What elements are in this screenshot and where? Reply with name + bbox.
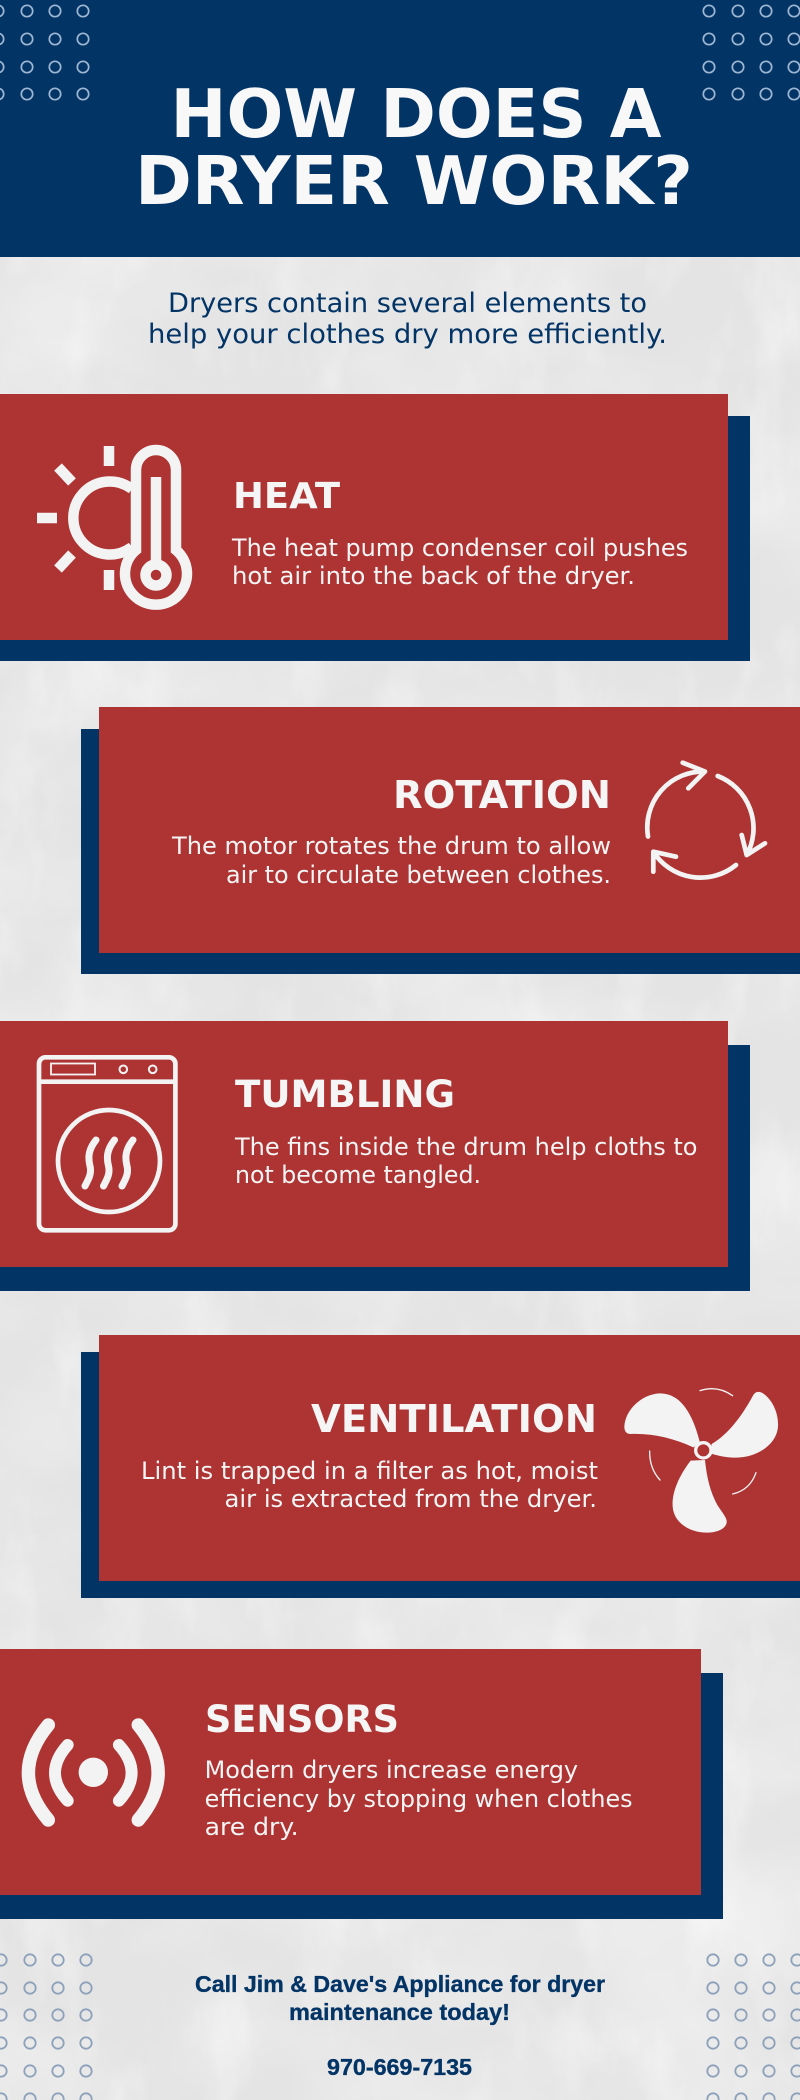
- icon: dryer machine: [39, 1057, 175, 1230]
- text: rotation description: air to circulate between clothes.: [226, 861, 611, 889]
- call to action: maintenance today!: [289, 1999, 510, 2025]
- text: sensors description: are dry.: [205, 1813, 299, 1841]
- subtitle: Dryers contain several elements to: [168, 288, 647, 319]
- text: tumbling description: [234, 1133, 698, 1189]
- call to action: [195, 1971, 605, 2080]
- panel: ventilation: [81, 1335, 800, 1598]
- panel: heat: [0, 394, 750, 661]
- text: sensors description: Modern dryers increase energy: [205, 1756, 578, 1784]
- panel: rotation: [81, 707, 800, 974]
- title: HOW DOES A: [170, 75, 662, 153]
- text: tumbling description: not become tangled.: [235, 1161, 481, 1189]
- heading: rotation: ROTATION: [393, 773, 611, 817]
- heading: sensors: SENSORS: [205, 1698, 399, 1741]
- icon: signal sensor: [28, 1725, 158, 1820]
- icon: sun and thermometer: [37, 446, 187, 605]
- title: [135, 75, 693, 220]
- dot pattern: bottom left: [0, 1954, 92, 2100]
- text: tumbling description: The fins inside the drum help cloths to: [234, 1133, 698, 1161]
- subtitle: [148, 288, 667, 350]
- text: ventilation description: Lint is trapped in a filter as hot, moist: [141, 1457, 598, 1485]
- text: heat description: [231, 534, 688, 590]
- text: sensors description: efficiency by stopping when clothes: [205, 1785, 633, 1813]
- text: sensors description: [205, 1756, 633, 1841]
- call to action: 970-669-7135: [327, 2054, 472, 2080]
- icon: circular arrows: [647, 763, 765, 878]
- text: heat description: hot air into the back of the dryer.: [232, 562, 635, 590]
- dot pattern: bottom right: [707, 1954, 800, 2100]
- dot pattern: top left: [0, 5, 89, 100]
- text: ventilation description: air is extracted from the dryer.: [224, 1485, 597, 1513]
- header band: [0, 0, 800, 257]
- text: heat description: The heat pump condenser coil pushes: [231, 534, 688, 562]
- title: DRYER WORK?: [135, 142, 693, 220]
- heading: ventilation: VENTILATION: [311, 1397, 597, 1441]
- subtitle: help your clothes dry more efficiently.: [148, 319, 667, 350]
- dot pattern: top right: [703, 5, 800, 100]
- panel: sensors: [0, 1649, 723, 1919]
- heading: heat: HEAT: [233, 476, 340, 517]
- call to action: Call Jim & Dave's Appliance for dryer: [195, 1971, 605, 1997]
- text: ventilation description: [141, 1457, 598, 1513]
- panel: tumbling: [0, 1021, 750, 1291]
- icon: fan: [624, 1389, 778, 1533]
- text: rotation description: [171, 832, 611, 889]
- heading: tumbling: TUMBLING: [235, 1073, 455, 1116]
- text: rotation description: The motor rotates the drum to allow: [171, 832, 611, 860]
